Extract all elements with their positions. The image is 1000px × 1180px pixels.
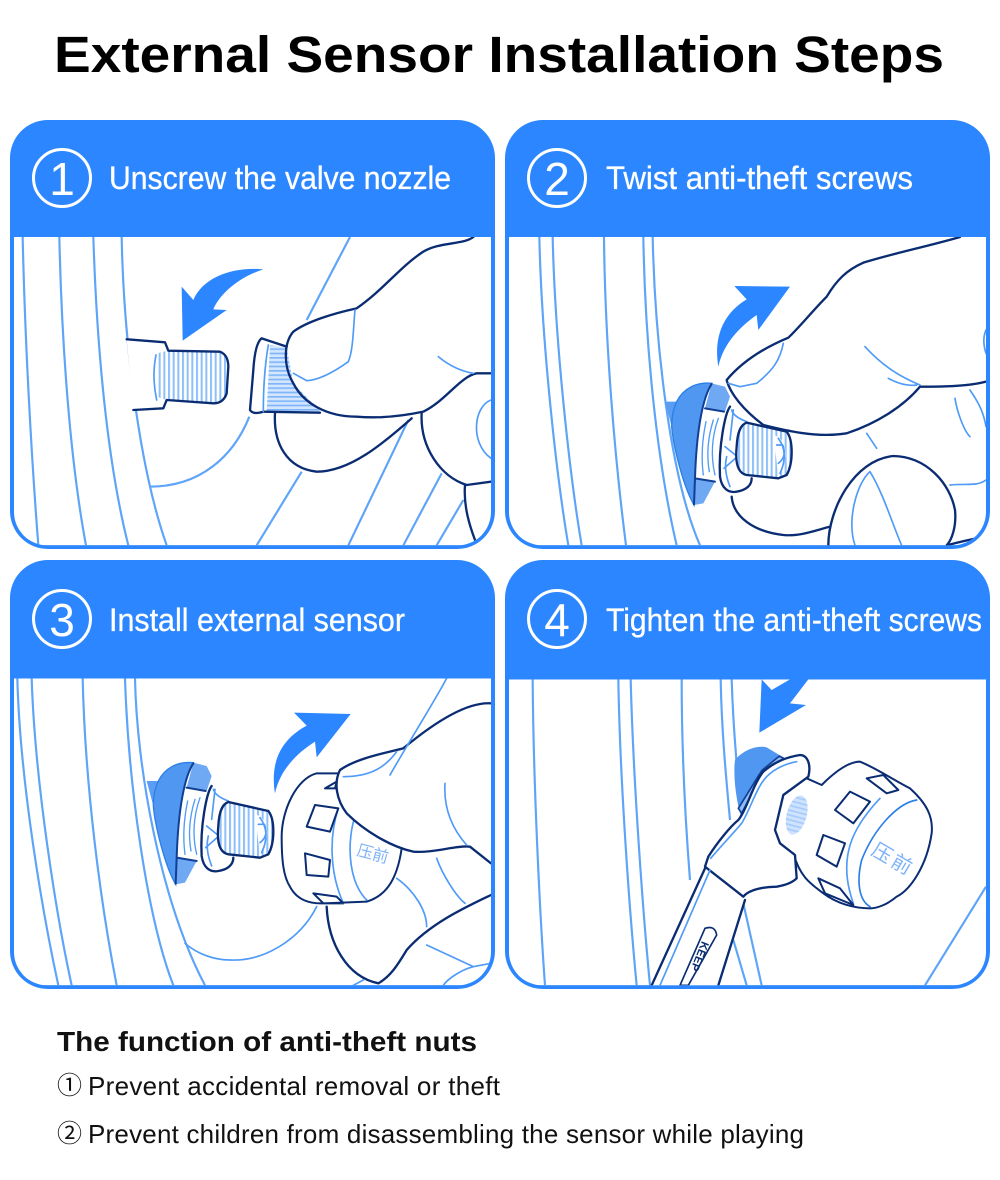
list item 2: Prevent children from disassembling the sensor while playing [88, 1119, 804, 1149]
step 4 number badge: 4 [544, 594, 570, 646]
step 1 number badge [34, 150, 90, 206]
step 2 number badge [528, 150, 586, 206]
valve with nut [147, 762, 273, 884]
step 1 number badge: 1 [49, 153, 75, 205]
panel: step 3 install external sensor [10, 560, 495, 989]
tyre lines [17, 678, 205, 985]
hand [185, 678, 491, 985]
arrow [759, 679, 808, 733]
list item 1: ① [57, 1072, 82, 1100]
step 4 number badge [528, 590, 586, 648]
step 3 number badge: 3 [49, 594, 75, 646]
wrench [652, 755, 809, 985]
section heading: the function of anti-theft nuts: The function of anti-theft nuts [57, 1026, 477, 1057]
threaded stem [786, 796, 808, 834]
valve stem [127, 339, 228, 410]
hand [275, 237, 491, 540]
title: External Sensor Installation Steps [54, 26, 944, 83]
step 2 number badge: 2 [544, 153, 570, 205]
tyre lines [533, 679, 986, 985]
sensor [282, 773, 402, 903]
valve nozzle cap [250, 338, 321, 413]
step 1 illustration [14, 237, 491, 545]
panel: step 2 twist anti-theft screws [505, 120, 990, 549]
step 4 illustration [509, 679, 986, 985]
step 2 illustration [509, 237, 986, 545]
step 1 heading: Unscrew the valve nozzle [109, 160, 451, 196]
tyre and wheel lines [23, 237, 463, 545]
panel: step 4 tighten the anti-theft screws [505, 560, 990, 989]
list item 2: ② [57, 1120, 82, 1148]
arrow [717, 286, 790, 367]
wrench label: KEEP [687, 940, 710, 973]
valve with nut [665, 383, 792, 505]
tyre lines [539, 237, 700, 545]
panel: step 1 unscrew the valve nozzle [10, 120, 495, 549]
step 3 number badge [34, 590, 90, 648]
disc and nut band [734, 747, 787, 813]
sensor [793, 762, 932, 908]
step 2 heading: Twist anti-theft screws [606, 160, 913, 196]
hand [727, 237, 986, 545]
sensor label: 压前 [867, 838, 918, 881]
list item 1: Prevent accidental removal or theft [88, 1071, 501, 1101]
sensor label: 压前 [355, 841, 391, 867]
arrow [274, 713, 351, 793]
step 3 heading: Install external sensor [109, 602, 405, 638]
arrow [182, 269, 263, 341]
step 3 illustration [14, 678, 491, 985]
